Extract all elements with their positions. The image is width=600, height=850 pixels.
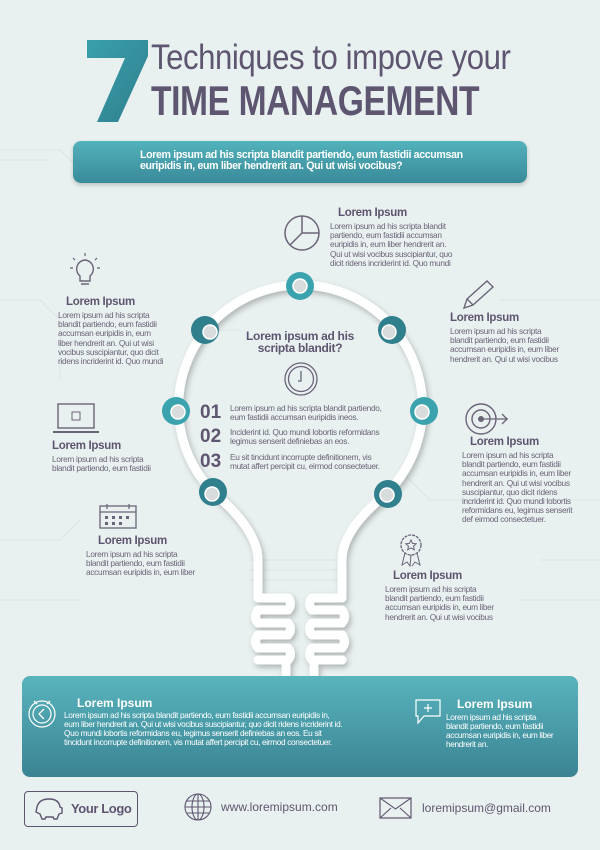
item: target: def eirmod consectetuer. (462, 514, 546, 524)
item: pie: Lorem Ipsum (338, 207, 407, 219)
item: target: blandit partiendo, eum fastidii (462, 459, 561, 469)
bulb (178, 285, 422, 682)
bottom panel: Quo mundi lobortis reformidans eu, legimus senserit definiebas an eos. Eu sit (64, 728, 322, 738)
website: www.loremipsum.com (221, 800, 338, 814)
item: bulb: Lorem ipsum ad his scripta (58, 310, 149, 320)
numbered list: eum fastidii accumsan euripidis ineos. (230, 412, 358, 422)
icon: laptop (53, 403, 99, 433)
item: bulb: Lorem Ipsum (66, 296, 135, 308)
item: target: accumsan euripidis in, eum liber (462, 468, 571, 478)
item: target: hendrerit an. Qui ut wisi vocibus (462, 478, 570, 488)
item: bulb: ridens incriderint id. Quo mundi (58, 356, 163, 366)
banner (73, 141, 527, 183)
item: calendar: Lorem Ipsum (98, 535, 167, 547)
item: laptop: blandit partiendo, eum fastidii (52, 463, 151, 473)
logo box (24, 791, 138, 827)
bottom panel: Lorem ipsum ad his scripta blandit partiendo, eum fastidii accumsan euripidis in, (64, 710, 329, 720)
numbered list: 03 (200, 451, 221, 472)
icon: target (465, 403, 508, 435)
item: target (462, 436, 572, 524)
item: badge: blandit partiendo, eum fastidii (385, 593, 484, 603)
banner: euripidis in, eum liber hendrerit an. Qui ut wisi vocibus? (140, 160, 402, 172)
website (184, 794, 338, 820)
item: bulb: blandit partiendo, eum fastidii (58, 319, 157, 329)
item: pie: Lorem ipsum ad his scripta blandit (330, 221, 446, 231)
icon: lightbulb (70, 253, 100, 285)
center heading: Lorem ipsum ad his (246, 329, 354, 343)
bottom panel: blandit partiendo, eum fastidii (446, 721, 543, 731)
logo box: Your Logo (71, 801, 131, 816)
numbered list: Eu sit tincidunt incorrupte definitionem, vis (230, 452, 371, 462)
center heading (246, 329, 354, 355)
title: Techniques to impove your (151, 38, 510, 77)
email (379, 797, 551, 819)
item: target: incriderint id. Quo mundi lobortis (462, 496, 571, 506)
banner: Lorem ipsum ad his scripta blandit partiendo, eum fastidii accumsan (140, 149, 463, 161)
numbered list: legimus senserit definiebas an eos. (230, 436, 349, 446)
item: pencil: blandit partiendo, eum fastidii (450, 335, 549, 345)
item: pie: partiendo, eum fastidii accumsan (330, 230, 442, 240)
bottom panel: tincidunt incorrupte definitionem, vis mutat affert percipit cu, eirmod consectetuer. (64, 737, 332, 747)
item: badge: Lorem ipsum ad his scripta (385, 584, 476, 594)
item: pencil: hendrerit an. Qui ut wisi vocibus (450, 354, 558, 364)
item: calendar: Lorem ipsum ad his scripta (86, 549, 177, 559)
icon: clock (284, 362, 318, 396)
title: TIME MANAGEMENT (151, 77, 479, 124)
email: loremipsum@gmail.com (422, 801, 551, 815)
item: badge: hendrerit an. Qui ut wisi vocibus (385, 612, 493, 622)
numbered list: 02 (200, 426, 221, 447)
bottom panel (22, 676, 578, 777)
title (87, 38, 510, 124)
item: calendar (86, 535, 196, 577)
icon: calendar (99, 504, 137, 529)
item: bulb: accumsan euripidis in, eum (58, 328, 151, 338)
icon: pencil (463, 280, 494, 309)
bottom panel: hendrerit an. (446, 739, 488, 749)
item: pie: Qui ut wisi vocibus suscipiantur, quo (330, 249, 452, 259)
item: pencil: accumsan euripidis in, eum liber (450, 344, 559, 354)
icon: badge (400, 534, 422, 567)
item: bulb: liber hendrerit an. Qui ut wisi (58, 338, 154, 348)
item: bulb: vocibus suscipiantur, quo dicit (58, 347, 158, 357)
item: calendar: accumsan euripidis in, eum liber (86, 567, 195, 577)
numbered list (200, 402, 382, 472)
icon: stopwatch (28, 700, 56, 728)
item: badge (385, 570, 494, 622)
numbered list: mutat affert percipit cu, eirmod consectetuer. (230, 461, 380, 471)
item: calendar: blandit partiendo, eum fastidii (86, 558, 185, 568)
item: pie: euripidis in, eum liber hendrerit an. (330, 239, 446, 249)
bottom panel: Lorem Ipsum (77, 696, 152, 710)
numbered list: Inciderint id. Quo mundi lobortis reformidans (230, 427, 379, 437)
item: pencil: Lorem ipsum ad his scripta (450, 326, 541, 336)
icon: chat plus (415, 699, 441, 724)
icon: pie chart (284, 215, 320, 251)
item: pie: dicit ridens incriderint id. Quo mundi (330, 258, 450, 268)
bottom panel: Lorem ipsum ad his scripta (446, 712, 536, 722)
item: badge: accumsan euripidis in, eum liber (385, 602, 494, 612)
item: pencil (450, 312, 560, 364)
center heading: scripta blandit? (258, 341, 342, 355)
item: target: suscipiantur, quo dicit ridens (462, 487, 557, 497)
item: pencil: Lorem Ipsum (450, 312, 519, 324)
bottom panel: Lorem Ipsum (457, 697, 532, 711)
item: bulb (58, 296, 163, 366)
item: target: reformidans eu, legimus senserit (462, 505, 572, 515)
item: pie (330, 207, 452, 268)
item: laptop: Lorem Ipsum (52, 440, 121, 452)
item: target: Lorem Ipsum (470, 436, 539, 448)
item: badge: Lorem Ipsum (393, 570, 462, 582)
item: laptop (52, 440, 151, 473)
bottom panel: accumsan euripidis in, eum liber (446, 730, 553, 740)
numbered list: 01 (200, 402, 221, 423)
item: laptop: Lorem ipsum ad his scripta (52, 454, 143, 464)
numbered list: Lorem ipsum ad his scripta blandit partiendo, (230, 403, 382, 413)
bottom panel: eum liber hendrerit an. Qui ut wisi vocibus suscipiantur, quo dicit ridens incriderint id. (64, 719, 342, 729)
item: target: Lorem ipsum ad his scripta (462, 450, 553, 460)
